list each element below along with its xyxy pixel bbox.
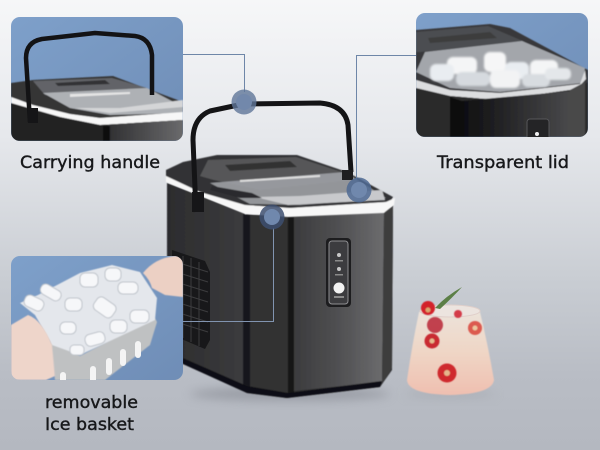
callout line: basket (183, 228, 274, 322)
side vent (172, 250, 210, 349)
marker: basket (260, 204, 284, 230)
machine body (167, 183, 393, 398)
panel 2 ice cubes (430, 52, 571, 88)
label: transparent lid: Transparent lid (436, 153, 569, 173)
ice maker machine (166, 103, 395, 401)
panel: transparent lid (416, 13, 588, 143)
basket slots (60, 341, 141, 380)
top lid (166, 155, 395, 217)
glass with drink (404, 287, 496, 398)
hands (11, 256, 183, 380)
label: removable ice basket (45, 393, 138, 435)
panel: ice basket (11, 256, 183, 386)
basket (20, 265, 157, 380)
panel 1 machine (11, 76, 183, 141)
garnish leaf (435, 287, 462, 309)
label: removable ice basket: removable (45, 393, 138, 413)
label: removable ice basket: Ice basket (45, 415, 134, 435)
carrying handle (193, 103, 351, 212)
panel 2 machine (416, 24, 588, 137)
callout line: lid (356, 56, 416, 180)
callout line: handle (183, 54, 244, 92)
glass body (407, 307, 494, 395)
raspberry slices (421, 301, 482, 382)
marker: handle (232, 90, 256, 114)
panel: carrying handle (11, 17, 183, 141)
marker: lid (346, 178, 372, 202)
panel 2 control button (526, 118, 550, 137)
control panel (326, 238, 351, 307)
ice cubes (22, 268, 149, 355)
label: carrying handle: Carrying handle (20, 153, 160, 173)
